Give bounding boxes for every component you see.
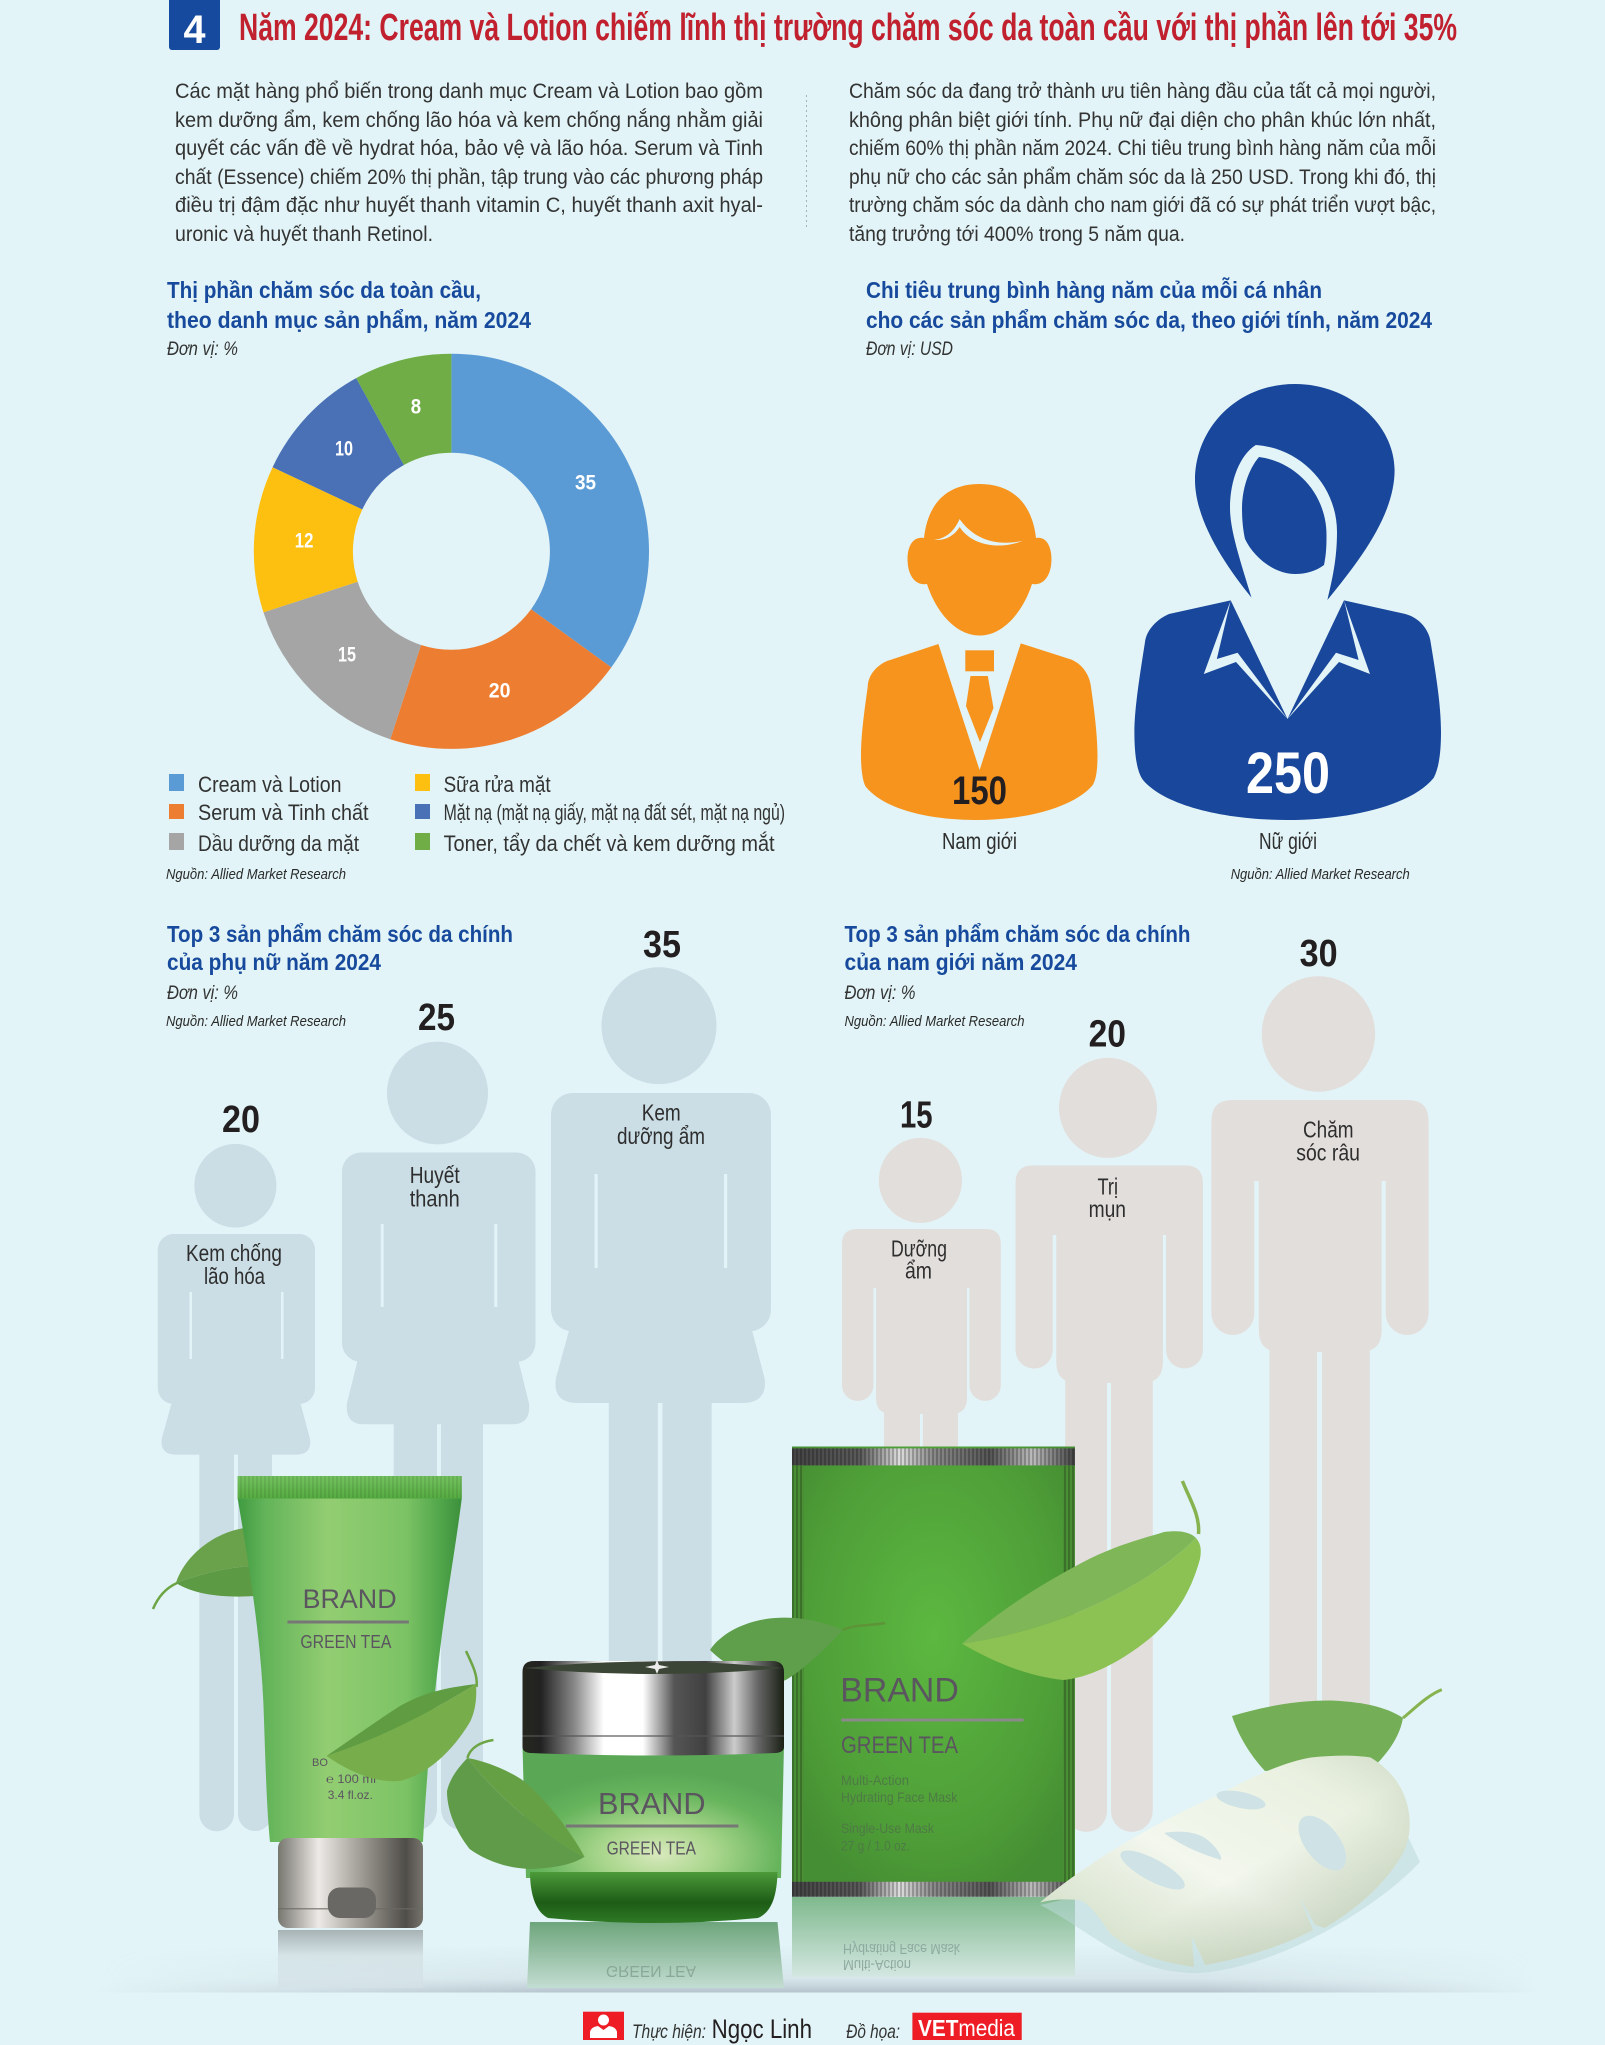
title block	[169, 0, 1457, 52]
figure: man 30 percent: 30	[1300, 933, 1338, 975]
donut chart: 12	[295, 530, 313, 552]
section number badge: 4	[184, 8, 206, 52]
leaf over packet behind jar	[710, 1618, 885, 1682]
icon: man 150 USD	[861, 484, 1098, 854]
figure: woman 35 percent: dưỡng ẩm	[617, 1123, 705, 1149]
logo: VETmedia: VETmedia	[918, 2015, 1015, 2041]
mask shadow	[1040, 1820, 1420, 1973]
product: cream tube: BO	[312, 1757, 328, 1769]
product: cream tube: 3.4 fl.oz.	[328, 1788, 373, 1802]
footer credits: Ngọc Linh	[712, 2014, 812, 2044]
figure: woman 25 percent: Huyết	[410, 1162, 460, 1188]
figure: woman 20 percent: Kem chống	[186, 1240, 282, 1266]
figure: man 20 percent: Trị	[1098, 1174, 1118, 1200]
donut legend: Serum và Tinh chất	[198, 800, 368, 825]
icon: man 150 USD: 150	[952, 769, 1007, 813]
figure: woman 20 percent: lão hóa	[204, 1263, 265, 1289]
intro text left: Các mặt hàng phổ biến trong danh mục Cream và Lotion bao gồm	[175, 79, 763, 103]
product: cream jar	[522, 1660, 784, 1923]
intro text left: quyết các vấn đề về hydrat hóa, bảo vệ và lão hóa. Serum và Tinh	[175, 136, 763, 160]
intro text right: trường chăm sóc da dành cho nam giới đã có sự phát triển vượt bậc,	[849, 193, 1436, 217]
figure: woman 35 percent: 35	[643, 924, 681, 966]
heading: donut chart: Thị phần chăm sóc da toàn cầu,	[167, 277, 481, 303]
product: sheet mask packet: BRAND	[840, 1671, 959, 1709]
donut chart: 10	[335, 438, 353, 460]
icon: woman 250 USD	[1134, 384, 1441, 854]
figure: man 30 percent: Chăm	[1303, 1116, 1354, 1142]
intro text right: chiếm 60% thị phần năm 2024. Chi tiêu trung bình hàng năm của mỗi	[849, 135, 1436, 160]
intro text left	[175, 79, 763, 246]
icon: woman 250 USD: Nữ giới	[1259, 828, 1317, 854]
leaf behind tube	[153, 1528, 255, 1609]
product: cream jar: BRAND	[598, 1786, 706, 1821]
product: sheet mask packet: 27 g / 1.0 oz.	[841, 1837, 910, 1853]
reflection: jar	[527, 1922, 784, 1988]
footer credits: Thực hiện:	[632, 2022, 706, 2043]
product: cream jar: GREEN TEA	[607, 1839, 696, 1859]
intro text right: không phân biệt giới tính. Phụ nữ đại diện cho phân khúc lớn nhất,	[849, 108, 1436, 132]
product: sheet mask packet: Single-Use Mask	[841, 1820, 935, 1836]
figure: woman 25 percent: 25	[418, 997, 455, 1039]
figure: man 30 percent	[1211, 933, 1429, 1800]
heading: spending chart	[866, 276, 1432, 360]
intro text right: Chăm sóc da đang trở thành ưu tiên hàng đầu của tất cả mọi người,	[849, 79, 1436, 103]
figure: man 15 percent	[842, 1094, 1001, 1500]
donut chart: 15	[338, 644, 356, 666]
product: sheet mask packet: Multi-Action	[841, 1772, 909, 1788]
donut chart: 20	[489, 680, 510, 702]
heading: donut chart: Đơn vị: %	[167, 339, 238, 360]
product: sheet mask packet: GREEN TEA	[841, 1732, 958, 1759]
icon: author	[583, 2012, 624, 2040]
heading: men's top products	[844, 921, 1190, 1030]
heading: women's top products: Nguồn: Allied Market Research	[166, 1014, 346, 1030]
donut legend: Toner, tẩy da chết và kem dưỡng mắt	[444, 831, 775, 856]
figure: man 20 percent	[1016, 1013, 1203, 1832]
product: cream tube: GREEN TEA	[300, 1632, 391, 1652]
heading: spending chart: Đơn vị: USD	[866, 339, 953, 360]
source: spending: Nguồn: Allied Market Research	[1231, 867, 1410, 883]
icon: man 150 USD: Nam giới	[942, 828, 1017, 854]
reflection: mask packet: Multi-Action	[843, 1956, 911, 1973]
intro text left: điều trị đậm đặc như huyết thanh vitamin C, huyết thanh axit hyal-	[175, 193, 763, 217]
heading: men's top products: của nam giới năm 2024	[844, 949, 1077, 975]
intro text right: phụ nữ cho các sản phẩm chăm sóc da là 250 USD. Trong khi đó, thị	[849, 165, 1436, 189]
heading: donut chart: theo danh mục sản phẩm, năm 2024	[167, 307, 531, 333]
figure: man 15 percent: Dưỡng	[891, 1235, 947, 1261]
donut legend: Mặt nạ (mặt nạ giấy, mặt nạ đất sét, mặt nạ ngủ)	[444, 800, 785, 825]
intro text left: chất (Essence) chiếm 20% thị phần, tập trung vào các phương pháp	[175, 165, 763, 189]
heading: women's top products: Top 3 sản phẩm chăm sóc da chính	[167, 921, 513, 947]
intro text left: uronic và huyết thanh Retinol.	[175, 222, 433, 246]
product: cream tube: ℮ 100 ml	[326, 1772, 376, 1786]
reflection: tube	[278, 1930, 423, 1988]
floor band	[166, 1961, 1490, 1992]
reflection: mask packet: Hydrating Face Mask	[843, 1940, 960, 1957]
donut chart: 8	[411, 396, 421, 418]
figure: woman 25 percent: thanh	[410, 1186, 460, 1212]
reflection: jar: GREEN TEA	[606, 1962, 696, 1979]
sheet mask	[1040, 1756, 1410, 1967]
source: donut: Nguồn: Allied Market Research	[166, 867, 346, 883]
figure: woman 25 percent	[342, 997, 536, 1831]
heading: donut chart	[167, 277, 531, 360]
leaf left of jar	[447, 1740, 584, 1869]
footer credits: Đồ họa:	[846, 2022, 900, 2043]
donut legend: Cream và Lotion	[198, 772, 342, 797]
figure: woman 20 percent	[158, 1099, 315, 1831]
reflection: mask packet	[792, 1897, 1075, 1977]
donut legend: Sữa rửa mặt	[444, 772, 551, 797]
heading: women's top products: của phụ nữ năm 2024	[167, 949, 381, 975]
leaf behind sheet mask	[1232, 1690, 1442, 1771]
figure: woman 20 percent: 20	[222, 1099, 260, 1141]
footer credits	[583, 2012, 1022, 2044]
figure: man 15 percent: ẩm	[905, 1258, 932, 1284]
figure: man 30 percent: sóc râu	[1296, 1140, 1360, 1166]
figure: man 20 percent: 20	[1089, 1013, 1126, 1055]
figure: woman 35 percent	[551, 924, 771, 1835]
product: cream tube: BRAND	[303, 1584, 397, 1614]
figure: man 15 percent: 15	[900, 1094, 933, 1136]
icon: woman 250 USD: 250	[1246, 741, 1330, 806]
heading: men's top products: Top 3 sản phẩm chăm sóc da chính	[844, 921, 1190, 947]
heading: women's top products: Đơn vị: %	[167, 983, 238, 1004]
heading: spending chart: Chi tiêu trung bình hàng năm của mỗi cá nhân	[866, 276, 1322, 303]
leaf on tube	[326, 1651, 477, 1781]
section number badge	[169, 0, 220, 52]
product: cream tube	[238, 1476, 462, 1928]
donut legend	[169, 772, 785, 856]
donut chart: 35	[575, 472, 596, 494]
intro text left: kem dưỡng ẩm, kem chống lão hóa và kem chống nắng nhằm giải	[175, 107, 763, 132]
figure: woman 35 percent: Kem	[642, 1100, 681, 1126]
intro text right	[849, 79, 1436, 246]
product: sheet mask packet: Hydrating Face Mask	[841, 1789, 958, 1805]
product: sheet mask packet	[792, 1446, 1075, 1897]
large leaf on packet	[962, 1481, 1201, 1680]
heading: men's top products: Đơn vị: %	[844, 983, 916, 1004]
heading: spending chart: cho các sản phẩm chăm sóc da, theo giới tính, năm 2024	[866, 307, 1432, 333]
figure: man 20 percent: mụn	[1089, 1196, 1126, 1222]
heading: men's top products: Nguồn: Allied Market Research	[844, 1014, 1024, 1030]
donut legend: Dầu dưỡng da mặt	[198, 831, 359, 856]
heading: women's top products	[166, 921, 513, 1030]
donut chart	[254, 354, 649, 749]
intro text right: tăng trưởng tới 400% trong 5 năm qua.	[849, 222, 1185, 246]
